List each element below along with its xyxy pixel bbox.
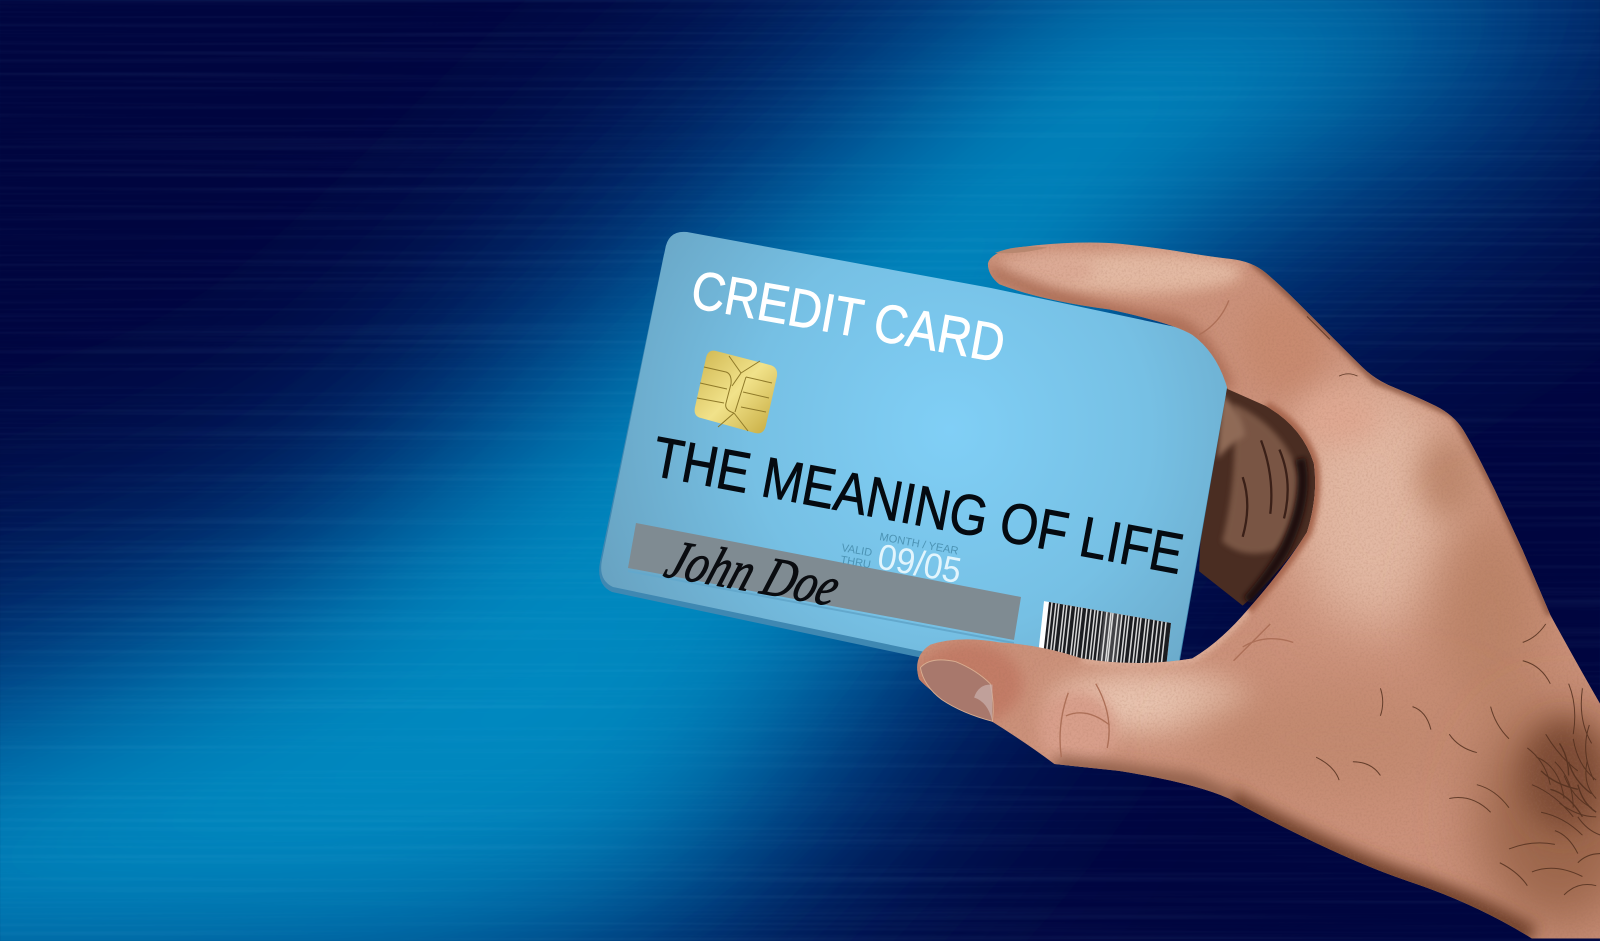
valid thru label: VALID: [840, 542, 873, 559]
skin base: [880, 220, 1600, 938]
skin texture: [922, 246, 1574, 862]
card face: [601, 232, 1232, 700]
icon: gold chip: [695, 351, 777, 433]
icon: thumbnail: [920, 660, 993, 721]
expiry date: 09/05: [875, 536, 965, 591]
panel: credit card: [599, 232, 1232, 706]
barcode: [1037, 601, 1171, 685]
hair on wrist: [1307, 316, 1600, 895]
creases: [1060, 300, 1293, 757]
signature strip: [628, 523, 1021, 644]
month and year label: MONTH / YEAR: [878, 531, 959, 558]
dark fingers behind the card: [1199, 385, 1315, 606]
hand holding the card: [880, 220, 1600, 938]
valid thru label: [839, 542, 873, 571]
card thickness edge: [599, 236, 1226, 706]
card heading: credit card: CREDIT CARD: [687, 260, 1010, 374]
card title: the meaning of life: THE MEANING OF LIFE: [648, 425, 1188, 587]
icon: index fingernail edge: [995, 246, 1048, 253]
signature: john doe: John Doe: [658, 530, 848, 618]
skin shading: [912, 252, 1600, 936]
valid thru label: THRU: [839, 554, 872, 571]
